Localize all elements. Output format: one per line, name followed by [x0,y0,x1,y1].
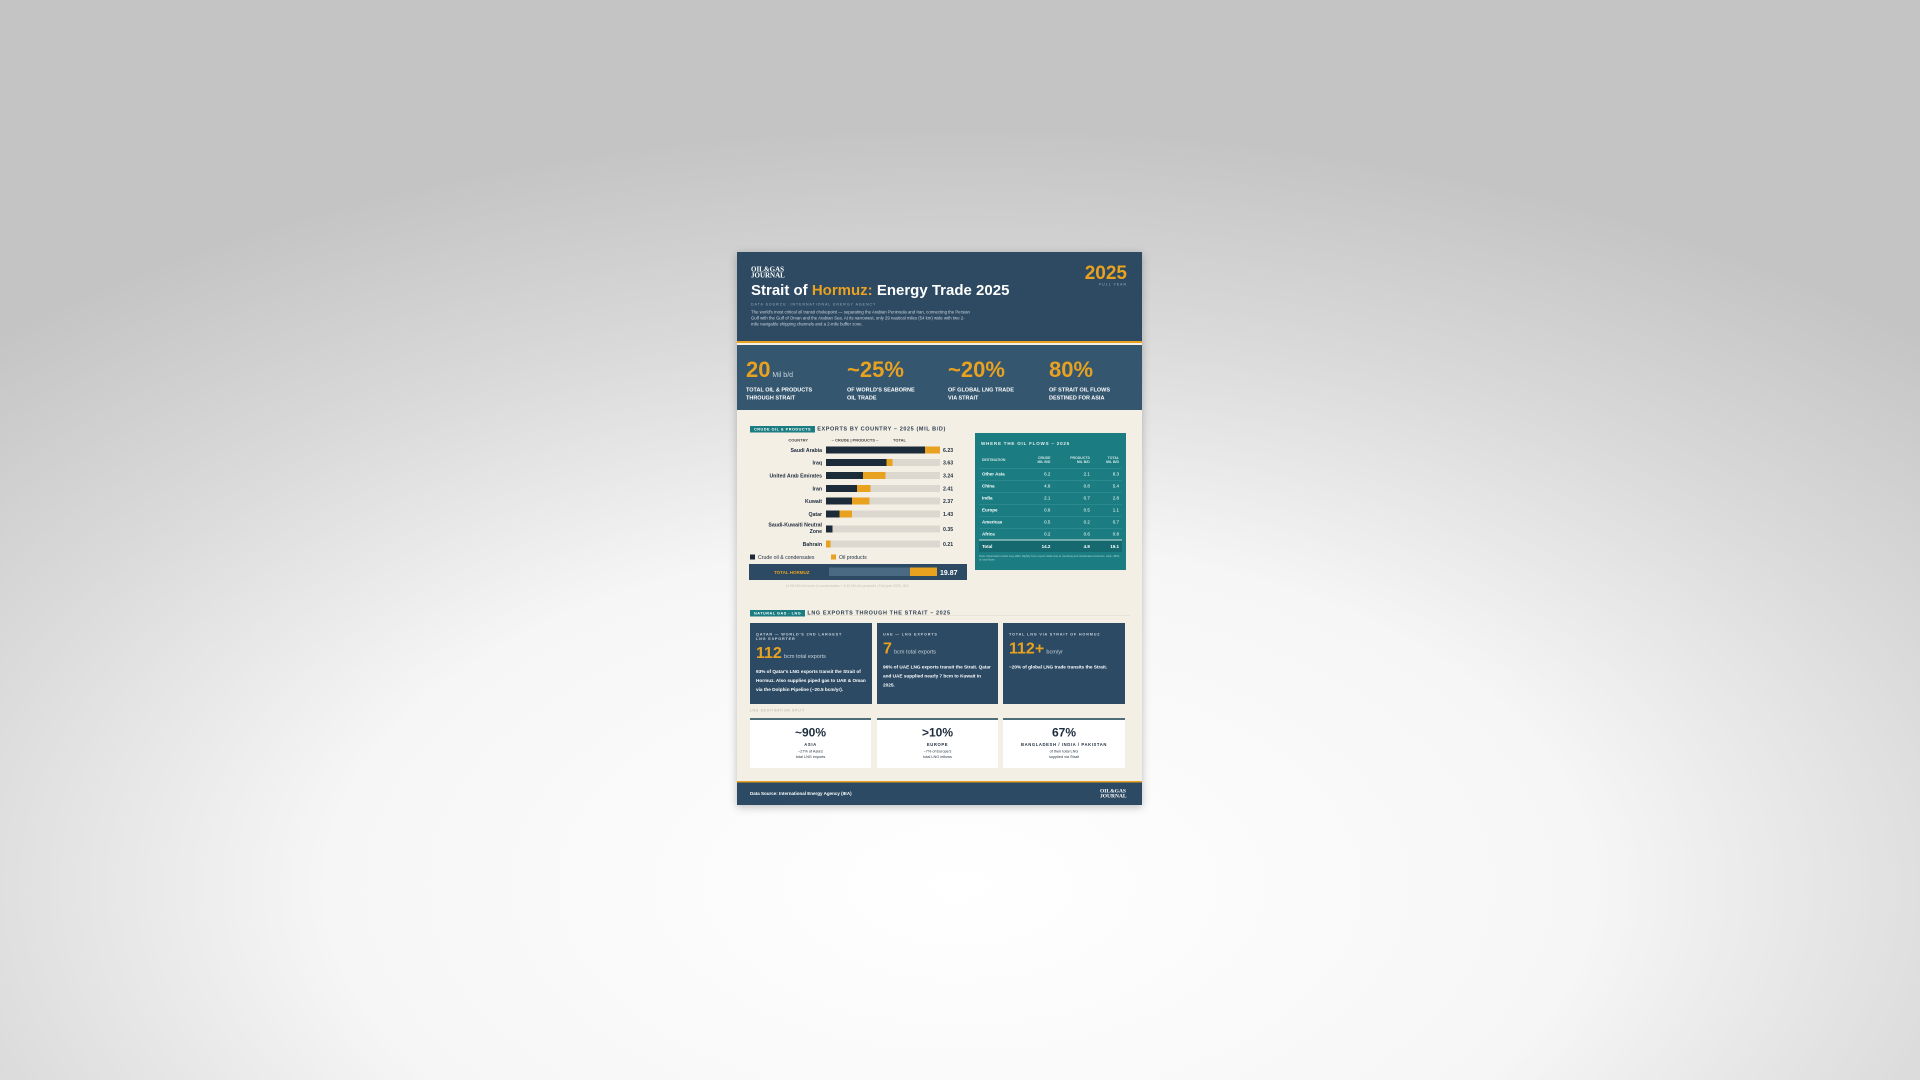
bar chart: 0.21 [943,542,953,548]
table: where the oil flows: 5.4 [1113,484,1119,488]
bar chart: 0.35 [943,527,953,533]
table: where the oil flows: 6.2 [1044,472,1050,476]
infographic page [737,252,1142,805]
bar chart: Saudi-Kuwaiti Neutral [768,522,823,528]
title: Strait of Hormuz: Energy Trade 2025 [751,282,1009,298]
bar chart: 2.37 [943,499,953,505]
LNG card: Qatar: QATAR — WORLD'S 2ND LARGEST [756,632,842,636]
LNG card: UAE [877,623,998,704]
intro text: The world's most critical oil transit chokepoint — separating the Arabian Peninsula and Iran, connecting the Persian Gulf with the Gulf of Oman and the Arabian Sea. At its narrowest, only 29 nautical miles (54 km) wide with two 2-mile navigable shipping channels and a 2-mile buffer zone. [751,310,970,326]
table: where the oil flows: 2.8 [1113,496,1119,500]
destination card: South Asia [1003,718,1125,768]
destination card: Europe: EUROPE [927,742,948,747]
table: where the oil flows: WHERE THE OIL FLOWS – 2025 [981,441,1070,446]
destination card: Europe: >10% [922,726,953,740]
bar chart: Kuwait [805,499,822,505]
destination card: Asia [750,718,871,768]
LNG card: Qatar: 93% of Qatar's LNG exports transit the Strait of Hormuz. Also supplies piped gas to UAE & Oman via the Dolphin Pipeline (~20.5 bcm/yr). [756,668,866,692]
total hormuz bar: 19.87 [940,570,958,577]
bar chart: Zone [810,529,822,535]
header [737,252,1142,343]
LNG card: total: TOTAL LNG VIA STRAIT OF HORMUZ [1009,632,1100,636]
table: where the oil flows: 1.1 [1113,508,1119,512]
LNG card: UAE: 96% of UAE LNG exports transit the Strait. Qatar and UAE supplied nearly 7 bcm to Kuwait in 2025. [883,664,991,688]
table: where the oil flows: Europe [982,508,998,512]
stat 4: 80% [1049,358,1093,382]
year badge: 2025 [1085,262,1127,284]
logo [751,266,785,280]
destination card: Asia: total LNG imports [796,754,825,759]
stat 3: ~20% [948,358,1005,382]
destination card: Asia: ~90% [795,726,826,740]
bar chart: 3.63 [943,460,953,466]
destination card: South Asia: of their total LNG [1050,749,1078,754]
bar chart: TOTAL [893,438,907,442]
LNG card: Qatar: LNG EXPORTER [756,636,796,641]
table: where the oil flows: Total [982,544,992,549]
bar chart: Oil products [839,555,867,561]
LNG card: total: ~20% of global LNG trade transits the Strait. [1009,664,1107,670]
bar chart: COUNTRY [788,438,808,442]
table: where the oil flows: MIL B/D [1037,460,1050,464]
table: where the oil flows: China [982,484,995,488]
footer: JOURNAL [1100,793,1127,799]
bar chart: Saudi Arabia [790,448,822,454]
table: where the oil flows: 0.8 [1084,484,1090,488]
stat 1: THROUGH STRAIT [746,395,795,401]
table: where the oil flows: 0.6 [1044,508,1050,512]
destination card: Asia: ASIA [804,742,817,747]
table: where the oil flows: Africa [982,531,995,536]
bar chart [749,438,967,588]
table: where the oil flows: PRODUCTS [1070,456,1090,460]
LNG card: total: 112+ bcm/yr [1009,639,1063,657]
bar chart: 1.43 [943,512,953,518]
stat 2: OF WORLD'S SEABORNE [847,387,915,393]
footer: OIL&GAS [1100,788,1126,794]
destination card: Asia: ~27% of Asia's [798,749,823,754]
destination card: South Asia: BANGLADESH / INDIA / PAKISTAN [1021,742,1107,747]
table: where the oil flows: 0.2 [1044,531,1050,536]
table: where the oil flows: 2.1 [1044,496,1050,500]
bar chart: 14.95 Mil b/d crude & condensates + 4.92 Mil b/d products | Full year 2025, IEA [786,584,909,588]
LNG card: total [1003,623,1125,704]
bar chart: Qatar [808,512,822,518]
destination card: Europe: total LNG inflows [923,754,952,759]
LNG card: Qatar: 112 bcm total exports [756,644,826,662]
table: where the oil flows: 0.7 [1084,496,1090,500]
section heading: exports by country: CRUDE OIL & PRODUCTS EXPORTS BY COUNTRY – 2025 (MIL B/D) [754,426,946,432]
total hormuz bar: TOTAL HORMUZ [774,570,810,575]
table: where the oil flows: Note: Destination totals may differ slightly from export totals due to rounding and unallocated volumes. Asia ~80% of total flows. [979,555,1119,562]
table: where the oil flows: 0.5 [1084,508,1090,512]
stat 2: OIL TRADE [847,395,877,401]
table: where the oil flows: DESTINATION [982,458,1005,462]
stat 4: DESTINED FOR ASIA [1049,395,1104,401]
table: where the oil flows: 4.9 [1084,544,1090,549]
destination card: Europe [877,718,998,768]
bar chart: 6.23 [943,448,953,454]
total hormuz bar [749,564,967,580]
table: where the oil flows: 8.3 [1113,472,1119,476]
table: where the oil flows: CRUDE [1038,456,1050,460]
bar chart: Bahrain [803,542,822,548]
destination split label: LNG DESTINATION SPLIT [750,709,805,712]
bar chart: United Arab Emirates [769,474,822,480]
section heading: LNG: NATURAL GAS · LNG LNG EXPORTS THROUGH THE STRAIT – 2025 [754,610,951,616]
destination card: South Asia: 67% [1052,726,1076,740]
table: where the oil flows: 0.6 [1084,531,1090,536]
table: where the oil flows [975,433,1126,570]
table: where the oil flows: 0.7 [1113,520,1119,524]
table: where the oil flows: 0.2 [1084,520,1090,524]
destination card: South Asia: supplied via Strait [1049,754,1079,759]
stat 4: OF STRAIT OIL FLOWS [1049,387,1110,393]
table: where the oil flows: Americas [982,520,1002,524]
logo: JOURNAL [751,272,785,280]
stat 3 [948,358,1014,401]
table: where the oil flows: TOTAL [1108,456,1119,460]
table: where the oil flows: 2.1 [1084,472,1090,476]
stat 1 [746,358,812,401]
table: where the oil flows: 0.5 [1044,520,1050,524]
footer [737,781,1142,805]
year badge: FULL YEAR [1099,283,1127,286]
stat 3: VIA STRAIT [948,395,978,401]
source line: DATA SOURCE: INTERNATIONAL ENERGY AGENCY [751,303,876,306]
table: where the oil flows: MIL B/D [1106,460,1119,464]
table: where the oil flows: Other Asia [982,472,1005,476]
table: where the oil flows: India [982,496,993,500]
logo: OIL&GAS [751,266,784,274]
LNG card: Qatar [750,623,872,704]
bar chart: Crude oil & condensates [758,555,815,561]
LNG card: UAE: 7 bcm total exports [883,639,936,657]
footer: Data Source: International Energy Agency (IEA) [750,791,852,796]
bar chart: Iraq [812,460,822,466]
stat 1: 20 Mil b/d [746,358,793,382]
table: where the oil flows: 19.1 [1110,544,1119,549]
bar chart: Iran [812,486,822,492]
stat 4 [1049,358,1110,401]
LNG card: UAE: UAE — LNG EXPORTS [883,632,938,636]
stat 2: ~25% [847,358,904,382]
stat 1: TOTAL OIL & PRODUCTS [746,387,812,393]
section heading: LNG [750,608,1130,616]
stats band [737,345,1142,410]
bar chart: 2.41 [943,486,953,492]
bar chart: 3.24 [943,474,953,480]
table: where the oil flows: 0.8 [1113,531,1119,536]
table: where the oil flows: 14.2 [1042,544,1050,549]
table: where the oil flows: 4.6 [1044,484,1050,488]
destination card: Europe: ~7% of Europe's [924,749,951,754]
table: where the oil flows: MIL B/D [1077,460,1090,464]
stat 2 [847,358,915,401]
stat 3: OF GLOBAL LNG TRADE [948,387,1014,393]
bar chart: – CRUDE | PRODUCTS – [832,438,879,442]
